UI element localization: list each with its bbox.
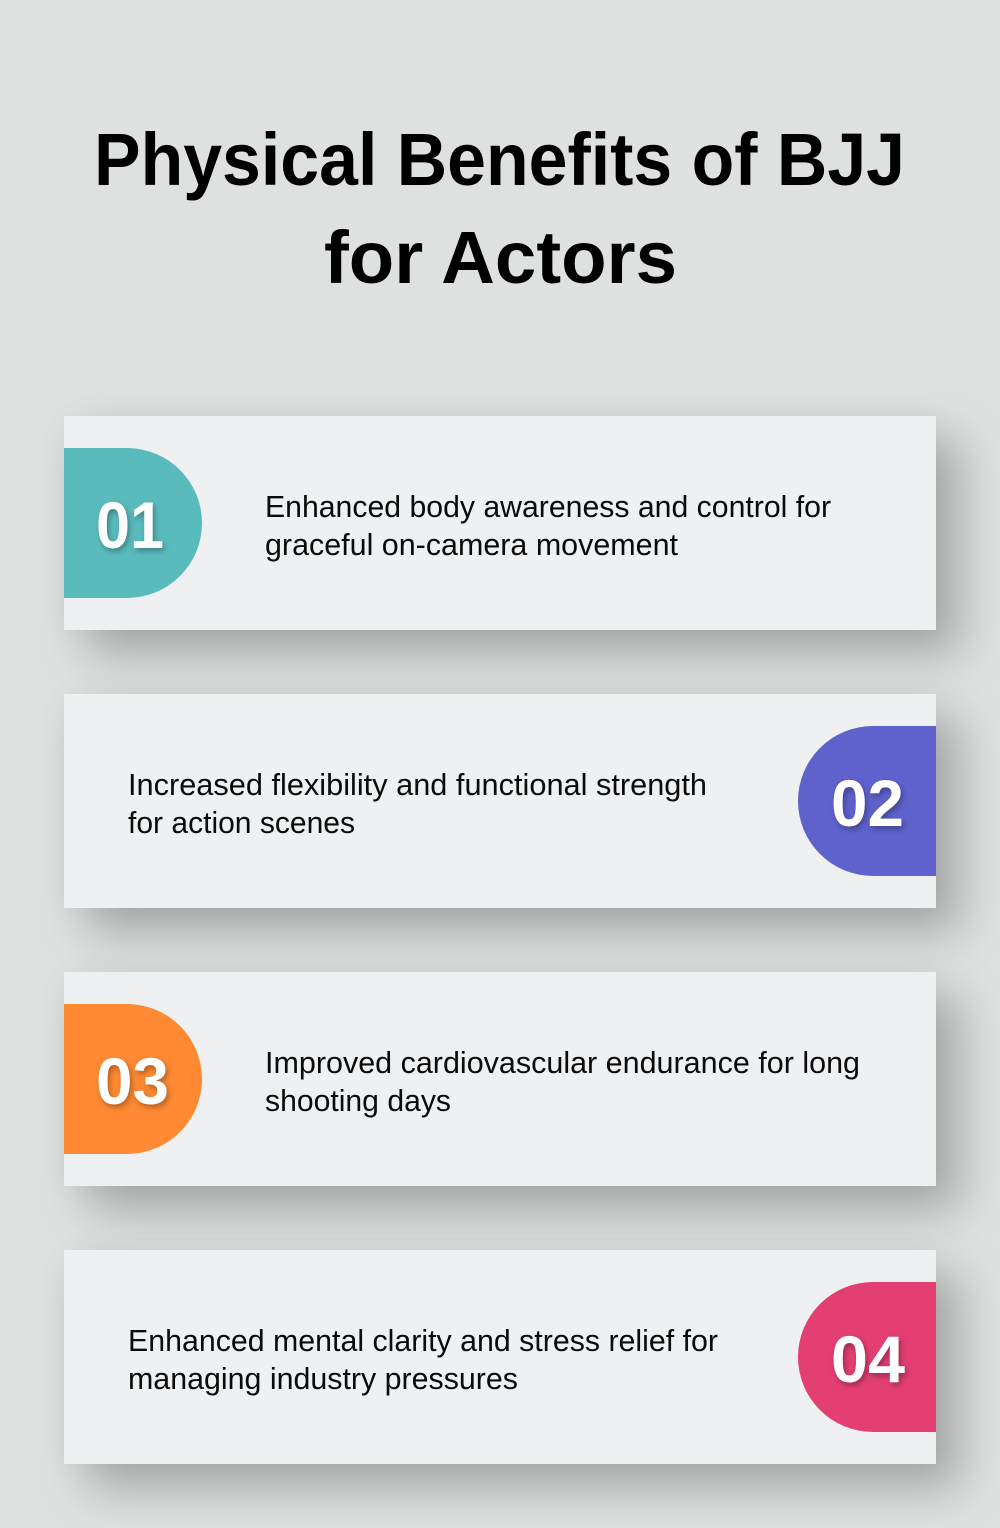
- title: [94, 118, 905, 299]
- text: benefit 03 description: shooting days: [265, 1083, 451, 1118]
- text: benefit 02 description: [128, 767, 707, 840]
- badge: 02: 02: [831, 766, 904, 840]
- panel: benefit 01: [64, 416, 936, 630]
- badge: 01: 01: [96, 488, 164, 562]
- text: benefit 01 description: Enhanced body awareness and control for: [265, 489, 831, 524]
- text: benefit 04 description: managing industry pressures: [128, 1361, 518, 1396]
- panel: benefit 04: [64, 1250, 936, 1464]
- panel: benefit 03: [64, 972, 936, 1186]
- text: benefit 02 description: Increased flexibility and functional strength: [128, 767, 707, 802]
- text: benefit 01 description: graceful on-camera movement: [265, 527, 678, 562]
- badge: 03: 03: [96, 1044, 169, 1118]
- text: benefit 02 description: for action scenes: [128, 805, 355, 840]
- badge: 01: [64, 448, 202, 598]
- title: Physical Benefits of BJJ: [94, 118, 905, 201]
- text: benefit 03 description: [265, 1045, 860, 1118]
- text: benefit 01 description: [265, 489, 831, 562]
- panel: benefit 02: [64, 694, 936, 908]
- badge: 04: 04: [831, 1322, 905, 1396]
- title: for Actors: [324, 216, 677, 299]
- badge: 02: [798, 726, 936, 876]
- text: benefit 04 description: Enhanced mental clarity and stress relief for: [128, 1323, 718, 1358]
- badge: 03: [64, 1004, 202, 1154]
- text: benefit 04 description: [128, 1323, 718, 1396]
- text: benefit 03 description: Improved cardiovascular endurance for long: [265, 1045, 860, 1080]
- badge: 04: [798, 1282, 936, 1432]
